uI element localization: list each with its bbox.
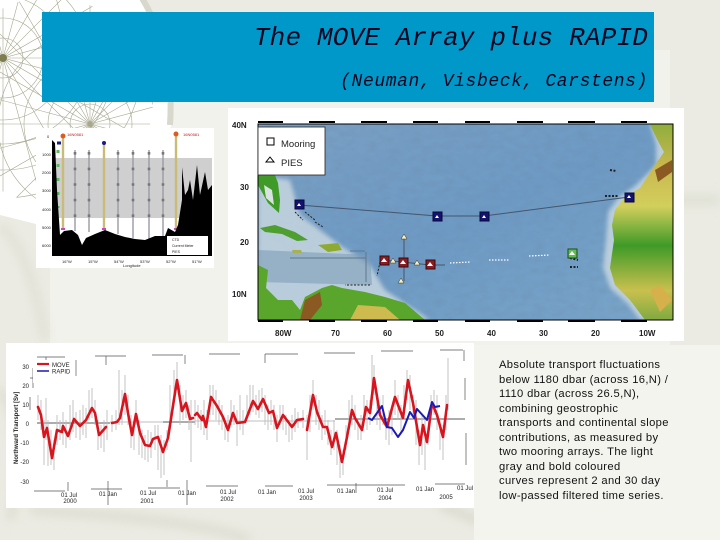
x axis labels: 01 Jan xyxy=(178,491,196,497)
land: africa xyxy=(610,124,673,320)
red MOVE 30-day series xyxy=(38,378,447,462)
caption text block: two mooring arrays. The light xyxy=(499,446,653,458)
axis labels: 53°W xyxy=(140,259,150,264)
mooring lines xyxy=(57,132,178,240)
map legend: PIES xyxy=(281,158,303,169)
y axis labels: 20 xyxy=(22,384,30,390)
x axis labels: 2002 xyxy=(220,497,234,503)
ocean xyxy=(258,124,673,320)
caption text block: low-passed filtered time series. xyxy=(499,490,664,502)
axis labels: 4000 xyxy=(42,207,52,212)
x axis labels: 2001 xyxy=(140,499,154,505)
map legend xyxy=(258,127,325,175)
x axis labels: 2005 xyxy=(439,495,453,501)
chart: mooring section across the array xyxy=(36,128,214,268)
y axis labels: 0 xyxy=(26,422,30,428)
x axis labels: 01 Jul xyxy=(457,486,473,492)
caption text block: Absolute transport fluctuations xyxy=(499,359,660,371)
land: florida xyxy=(258,175,280,213)
dotted extension xyxy=(450,255,550,263)
chart: mooring section across the array: 16N0581 xyxy=(183,132,200,137)
depth band xyxy=(52,158,212,218)
time series chart: northward transport xyxy=(6,343,474,508)
caption text block: combining geostrophic xyxy=(499,403,618,415)
latitude labels xyxy=(232,121,249,299)
axis labels: 6000 xyxy=(42,243,52,248)
caption text block xyxy=(499,359,669,502)
latitude labels: 20 xyxy=(240,238,249,247)
axis labels: 52°W xyxy=(166,259,176,264)
chart legend xyxy=(33,360,77,383)
caption text block: below 1180 dbar (across 16,N) / xyxy=(499,374,668,386)
longitude labels xyxy=(275,329,656,338)
axis labels: 2000 xyxy=(42,170,52,175)
zero line xyxy=(37,419,465,423)
shelf shallows xyxy=(258,124,672,320)
latitude labels: 30 xyxy=(240,183,249,192)
y axis title: Northward Transport [Sv] xyxy=(14,392,20,464)
map panel: MOVE and RAPID moorings in the Atlantic xyxy=(228,108,684,341)
x axis labels: 2000 xyxy=(63,499,77,505)
y axis labels: 10 xyxy=(22,403,30,409)
blue RAPID 30-day series xyxy=(368,402,440,437)
longitude labels: 60 xyxy=(383,329,392,338)
y axis labels xyxy=(20,365,30,486)
bathymetry xyxy=(52,140,212,256)
longitude labels: 50 xyxy=(435,329,444,338)
legend: Current Meter xyxy=(172,244,194,248)
longitude labels: 80W xyxy=(275,329,292,338)
latitude labels: 10N xyxy=(232,290,247,299)
subtitle: (Neuman, Visbeck, Carstens) xyxy=(340,72,648,92)
y axis labels: -10 xyxy=(20,441,30,447)
longitude labels: 70 xyxy=(331,329,340,338)
land: south america xyxy=(258,265,425,320)
caption text block: contributions, as measured by xyxy=(499,432,658,444)
title: The MOVE Array plus RAPID xyxy=(254,23,648,53)
longitude labels: 30 xyxy=(539,329,548,338)
chart legend: MOVE xyxy=(52,363,70,369)
x axis labels: 01 Jul xyxy=(140,491,156,497)
legend xyxy=(167,236,208,255)
axis labels: 3000 xyxy=(42,188,52,193)
y axis labels: -30 xyxy=(20,480,30,486)
axis labels xyxy=(42,134,202,268)
mooring markers xyxy=(295,193,634,283)
islands xyxy=(570,170,619,267)
axis labels: Longitude xyxy=(123,263,141,268)
title banner xyxy=(42,12,654,102)
x axis labels xyxy=(61,486,473,505)
MOVE line xyxy=(390,239,445,281)
land: cuba xyxy=(260,225,308,241)
x axis labels: 01 Jul xyxy=(377,488,393,494)
broken frame xyxy=(30,350,466,505)
caption text block: curves represent 2 and 30 day xyxy=(499,475,660,487)
axis labels: 1000 xyxy=(42,152,52,157)
land: hispaniola xyxy=(318,243,342,252)
x axis labels: 01 Jul xyxy=(220,490,236,496)
x axis labels: 01 Jul xyxy=(298,489,314,495)
x axis labels: 01 Jul xyxy=(61,493,77,499)
legend: PIES xyxy=(172,250,181,254)
axis labels: 0 xyxy=(47,134,50,139)
x axis labels: 01 Jan xyxy=(337,489,355,495)
y axis labels: 30 xyxy=(22,365,30,371)
axis labels: 5000 xyxy=(42,225,52,230)
x axis labels: 01 Jan xyxy=(416,487,434,493)
x axis labels: 01 Jan xyxy=(99,492,117,498)
map legend: Mooring xyxy=(281,139,315,150)
caption text block: 1110 dbar (across 26.5,N), xyxy=(499,388,640,400)
chart: mooring section across the array: 16N0581 xyxy=(67,132,84,137)
chart legend: RAPID xyxy=(52,370,71,376)
axis labels: 16°W xyxy=(62,259,72,264)
x axis labels: 01 Jan xyxy=(258,490,276,496)
latitude labels: 40N xyxy=(232,121,247,130)
axis labels: 15°W xyxy=(88,259,98,264)
axis labels: 51°W xyxy=(192,259,202,264)
caption text block: gray and bold coloured xyxy=(499,461,621,473)
caption text block: transports and continental slope xyxy=(499,417,669,429)
x axis labels: 2004 xyxy=(378,496,392,502)
y axis labels: -20 xyxy=(20,460,30,466)
x axis labels: 2003 xyxy=(299,496,313,502)
gray 2-day series xyxy=(38,355,448,478)
RAPID line xyxy=(299,197,629,216)
legend: CTD xyxy=(172,238,180,242)
longitude labels: 40 xyxy=(487,329,496,338)
map frame xyxy=(258,124,673,320)
longitude labels: 10W xyxy=(639,329,656,338)
longitude labels: 20 xyxy=(591,329,600,338)
axis labels: 54°W xyxy=(114,259,124,264)
